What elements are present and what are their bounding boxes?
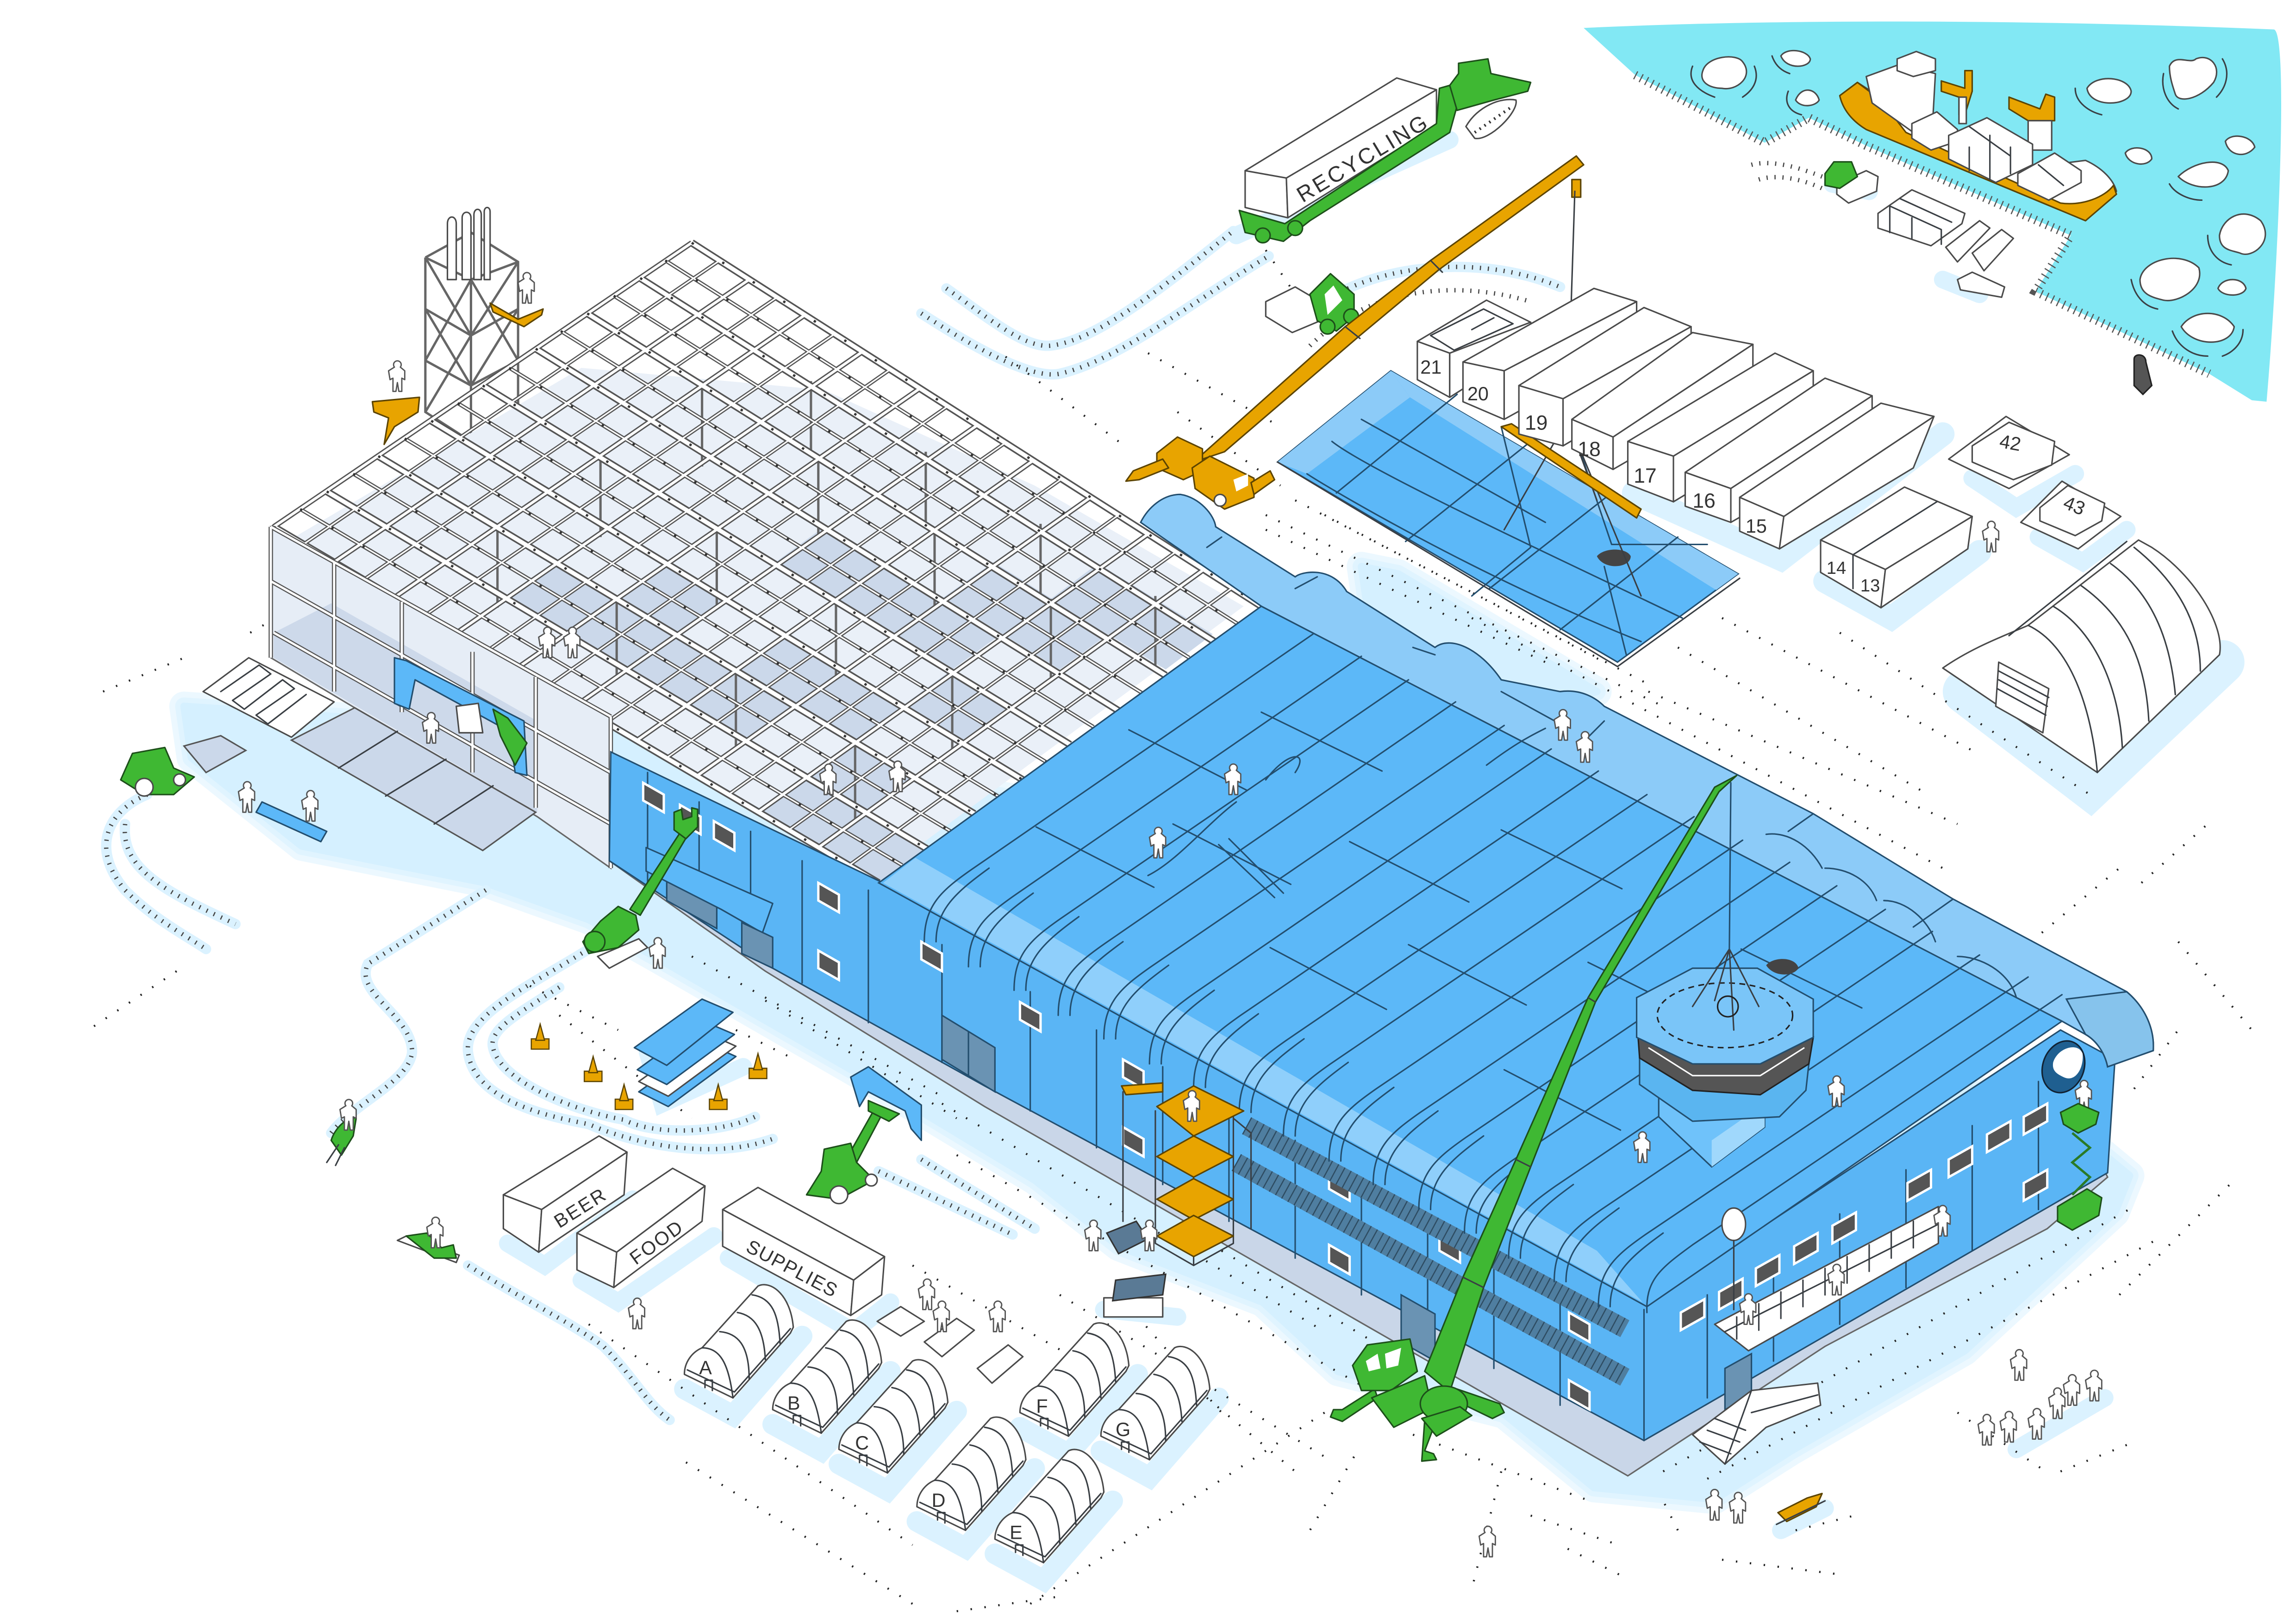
parapet seams [1207, 537, 2016, 998]
snowmobile left [327, 1100, 356, 1165]
roof section being lifted [1278, 371, 1740, 666]
tent D: D [932, 1490, 945, 1511]
entrance stairs [1692, 1383, 1821, 1464]
beer container: BEER [550, 1183, 611, 1232]
cargo ship [1840, 51, 2116, 221]
tents A to G [684, 1285, 1210, 1563]
boom [1194, 156, 1584, 462]
containers 14 and 13: 13 [1860, 576, 1880, 596]
snowmobile front [397, 1217, 459, 1262]
container 20: 20 [1467, 383, 1489, 404]
container 15 [1740, 403, 1934, 549]
orange lift low [372, 397, 419, 444]
supplies container: SUPPLIES [743, 1236, 842, 1302]
tent G [1101, 1346, 1210, 1460]
hoist line [1729, 783, 1731, 949]
boom sections [1345, 261, 1442, 338]
tent E [995, 1449, 1104, 1563]
roof ribs [924, 634, 2062, 1312]
workers on roof [1149, 709, 1844, 1163]
stacked blue roof panels [634, 999, 736, 1107]
far parapet [1141, 494, 2153, 1067]
container 17 [1628, 353, 1813, 502]
ribbed mat [203, 658, 334, 737]
orange hull stripe [1840, 82, 2116, 221]
traffic cones [531, 1024, 767, 1109]
balloon [1722, 1208, 1746, 1310]
doors [646, 847, 1752, 1410]
container 21: 21 [1420, 357, 1441, 378]
tent F: F [1036, 1395, 1048, 1417]
container 16 [1685, 378, 1872, 522]
glazing band [1638, 1038, 1813, 1095]
lifting tackle [1692, 949, 1759, 1030]
turret top [1637, 968, 1813, 1064]
tent D [917, 1417, 1026, 1530]
frame beams white core [274, 243, 1261, 883]
orange lift top [490, 303, 543, 327]
orange sled [1777, 1493, 1825, 1524]
stippled ground dots [88, 250, 2252, 1611]
frame bolt nodes [274, 243, 1261, 883]
tent E: E [1010, 1522, 1023, 1543]
penguin [2134, 355, 2152, 394]
octagonal turret [1637, 949, 1813, 1167]
tent A [684, 1285, 793, 1398]
wall [609, 752, 2115, 1441]
two people near stairs [1706, 1489, 1746, 1523]
quay containers [1878, 190, 2014, 297]
roof seams [1036, 712, 1862, 1130]
large fabric tent [1943, 540, 2220, 772]
container 16: 16 [1692, 490, 1716, 512]
vent dome [1766, 959, 1798, 975]
icebergs [1691, 50, 2265, 356]
floor slabs [292, 708, 536, 851]
tent G: G [1116, 1419, 1130, 1440]
frame columns [498, 381, 1155, 821]
containers 14 and 13: 14 [1827, 558, 1846, 578]
green telehandler at wall [583, 808, 698, 968]
crowd of people [1978, 1349, 2102, 1445]
hoist lines and spreader beam [1504, 191, 1641, 596]
frame floor [287, 368, 1244, 876]
building windows [643, 783, 2047, 1410]
tent C: C [855, 1432, 869, 1454]
turret base [1659, 1096, 1765, 1167]
tractor cab [1255, 59, 1531, 243]
container 18: 18 [1578, 438, 1601, 461]
pad 42: 42 [1998, 430, 2022, 455]
bridge tower [1866, 65, 1935, 132]
hoisted solar panel with workers [1085, 1220, 1157, 1254]
frame beams dark casing [274, 243, 1261, 883]
green tractor with pallet [121, 736, 246, 796]
food container: FOOD [626, 1216, 688, 1269]
pillars [648, 772, 2039, 1441]
plinth [609, 861, 2108, 1476]
logo sign and scissor lift [2035, 1035, 2102, 1230]
frame end wall [271, 527, 611, 868]
crane box and turntable [1372, 1376, 1432, 1427]
crane body [1157, 437, 1203, 480]
workers carrying blue plank [238, 782, 327, 842]
green loader on quay [1825, 162, 1878, 203]
deck cargo [1912, 112, 1958, 150]
beer container [503, 1136, 627, 1252]
pad 43 [2021, 481, 2121, 549]
worker beside containers [1983, 521, 1999, 552]
numbered storage containers [1417, 288, 1972, 608]
tent B [773, 1320, 882, 1433]
outriggers [1330, 1389, 1504, 1461]
container 15: 15 [1746, 516, 1767, 537]
skylight openings and cables [1148, 728, 1545, 898]
containers 14 and 13 [1821, 487, 1972, 608]
label: recycling: RECYCLING [1292, 109, 1434, 207]
rib doubles at eave [936, 868, 1663, 1306]
green mobile crane [1330, 776, 1737, 1461]
sea [1584, 21, 2281, 402]
tent C [839, 1360, 948, 1473]
trailer box [1245, 78, 1436, 218]
tent A: A [699, 1357, 712, 1379]
roof surface [879, 606, 2062, 1306]
food container [577, 1169, 705, 1287]
pad 42 [1949, 417, 2069, 489]
lone person [1479, 1526, 1495, 1557]
coastline hatching [1635, 75, 2209, 374]
green telehandler with blue panel [806, 1067, 921, 1204]
panel: sea with icebergs [1584, 21, 2281, 402]
container 19 [1519, 308, 1691, 446]
worker by food container [629, 1298, 645, 1329]
dark facade panel bands [1236, 1126, 1625, 1377]
boom sections [1463, 998, 1596, 1287]
container 17: 17 [1634, 465, 1657, 487]
vehicle tracks [106, 163, 1822, 1420]
steel tower with pipes [372, 207, 543, 444]
green excavator with load [1266, 274, 1359, 334]
pad 43: 43 [2060, 492, 2088, 520]
ship cranes [1941, 71, 1972, 115]
pallet of solar panels [1104, 1274, 1166, 1317]
balcony with railing [1715, 1206, 1950, 1351]
orange mobile crane [1126, 156, 1641, 596]
scaffold with orange platforms [1122, 1083, 1251, 1265]
hook [1572, 180, 1581, 197]
green trailer bed [1239, 85, 1457, 241]
container 18 [1572, 333, 1753, 469]
container 19: 19 [1525, 411, 1547, 434]
turret ring [1640, 1058, 1809, 1121]
blue door canopy in frame [394, 658, 527, 776]
container 20 [1463, 288, 1637, 419]
crane cab [1353, 1339, 1417, 1391]
light eave strip [883, 858, 1642, 1302]
tent F [1020, 1323, 1129, 1436]
steel frame section [274, 243, 1261, 883]
boom [1425, 776, 1737, 1392]
container 21 [1417, 300, 1531, 397]
recycling truck [1239, 59, 1531, 243]
darker floor panels [506, 527, 1213, 883]
blue building walls [609, 752, 2115, 1476]
tent B: B [787, 1393, 800, 1414]
gable end [2066, 992, 2153, 1067]
supplies container [723, 1188, 885, 1315]
blue roof [879, 494, 2153, 1312]
picnic tables and workers [877, 1279, 1023, 1383]
figures inside frame [539, 627, 905, 795]
white hull [1858, 82, 2116, 221]
